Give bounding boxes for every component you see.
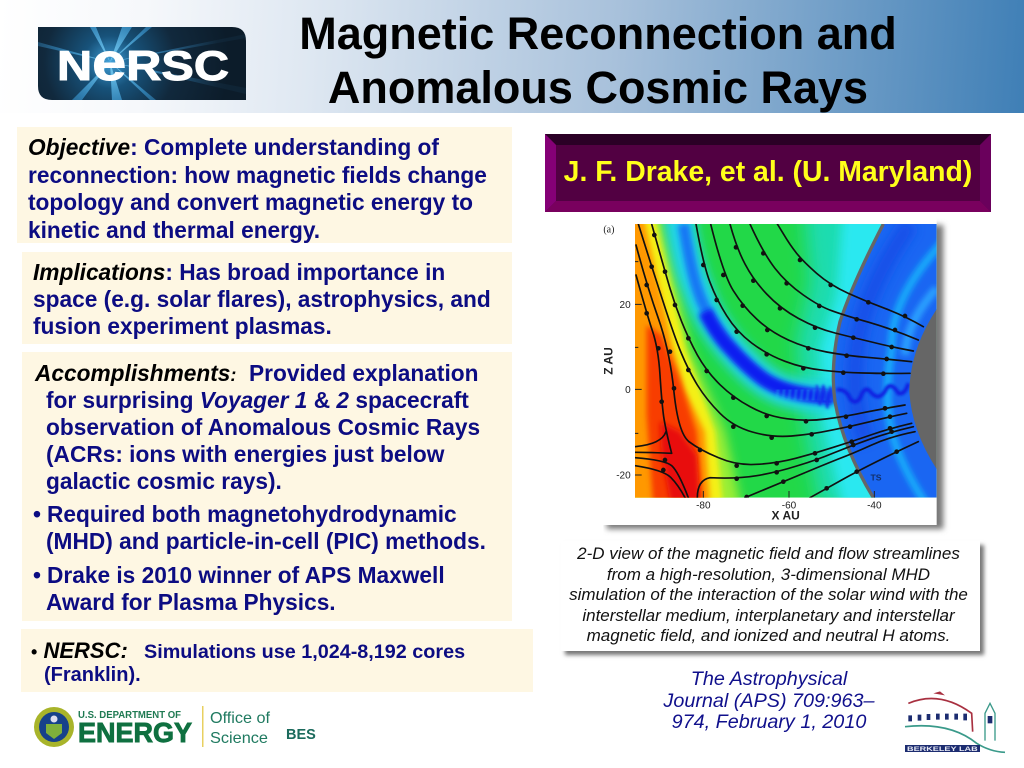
panel: accomplishments: • <box>33 562 41 588</box>
streamlines <box>635 224 923 498</box>
citation <box>663 668 875 733</box>
logo: DOE Office of Science: U.S. DEPARTMENT OF <box>78 710 181 721</box>
axes ticks and labels: -80 <box>696 500 711 511</box>
caption box: 2-D view of the magnetic field and flow streamlines <box>577 544 960 563</box>
panel: NERSC computing <box>21 629 533 692</box>
logo: NERSC <box>38 27 246 100</box>
panel: objective: kinetic and thermal energy. <box>28 217 320 243</box>
axes ticks and labels <box>601 225 882 523</box>
panel: NERSC computing: (Franklin). <box>44 664 141 686</box>
termination shock <box>833 224 883 498</box>
caption box: magnetic field, and ionized and neutral H atoms. <box>587 626 950 645</box>
panel: objective: topology and convert magnetic energy to <box>28 189 473 215</box>
panel: accomplishments: galactic cosmic rays). <box>46 468 282 494</box>
panel: accomplishments: Award for Plasma Physics. <box>46 589 336 615</box>
panel: accomplishments: (MHD) and particle-in-cell (PIC) methods. <box>46 528 486 554</box>
axes ticks and labels: Z AU <box>601 347 615 375</box>
axes ticks and labels: -40 <box>867 500 882 511</box>
caption box: interstellar medium, interplanetary and interstellar <box>582 606 955 625</box>
citation: Journal (APS) 709:963– <box>663 690 875 712</box>
heat map <box>635 224 937 498</box>
caption box <box>561 541 980 651</box>
citation: 974, February 1, 2010 <box>672 711 866 733</box>
panel: accomplishments: (ACRs: ions with energies just below <box>46 441 444 467</box>
axes ticks and labels: 0 <box>625 385 631 396</box>
figure: heliosheath simulation <box>601 221 948 533</box>
panel: objective: Objective: Complete understanding of <box>28 134 439 160</box>
wake wiggles <box>817 385 833 408</box>
author name: J. F. Drake, et al. (U. Maryland) <box>564 156 972 188</box>
header band <box>0 0 1024 113</box>
logo: NERSC: NeRSC <box>57 33 229 92</box>
panel: accomplishments: Accomplishments: Provided explanation <box>35 360 478 386</box>
streamline arrowheads <box>644 233 907 499</box>
panel: accomplishments: • <box>33 501 41 527</box>
panel: objective: reconnection: how magnetic fields change <box>28 162 487 188</box>
caption box: from a high-resolution, 3-dimensional MHD <box>607 565 930 584</box>
axes ticks and labels: TS <box>870 473 882 483</box>
panel: implications: fusion experiment plasmas. <box>33 313 332 339</box>
panel: implications: Implications: Has broad importance in <box>33 259 445 285</box>
panel: accomplishments: observation of Anomalous Cosmic Rays <box>46 414 480 440</box>
panel: objective <box>17 127 512 243</box>
axes ticks and labels: X AU <box>772 509 800 523</box>
logo: Berkeley Lab <box>904 691 1006 754</box>
panel: author banner <box>545 134 991 212</box>
panel: accomplishments: Required both magnetohydrodynamic <box>47 501 457 527</box>
figure shadow and card <box>590 215 943 540</box>
title: Anomalous Cosmic Rays <box>328 62 868 113</box>
caption box: simulation of the interaction of the solar wind with the <box>569 585 968 604</box>
citation: The Astrophysical <box>691 668 847 690</box>
axes ticks and labels: -60 <box>782 500 797 511</box>
panel: implications: space (e.g. solar flares), astrophysics, and <box>33 286 491 312</box>
title: Magnetic Reconnection and <box>299 8 897 59</box>
panel: implications <box>22 252 512 344</box>
axes ticks and labels: (a) <box>603 225 614 236</box>
logo: DOE Office of Science <box>34 706 316 748</box>
logo: DOE Office of Science: ENERGY <box>78 717 192 748</box>
logo: DOE Office of Science: Science <box>210 730 268 747</box>
panel: accomplishments: Drake is 2010 winner of APS Maxwell <box>47 562 445 588</box>
logo: Berkeley Lab: BERKELEY LAB <box>907 746 978 753</box>
panel: accomplishments: for surprising Voyager 1 & 2 spacecraft <box>46 387 469 413</box>
logo: DOE Office of Science: Office of <box>210 710 271 727</box>
inner body <box>909 307 938 472</box>
panel: accomplishments <box>22 352 512 621</box>
axes ticks and labels: -20 <box>616 471 631 482</box>
axes ticks and labels: 20 <box>620 300 631 311</box>
logo: DOE Office of Science: BES <box>286 727 316 743</box>
panel: NERSC computing: • NERSC: Simulations use 1,024-8,192 cores <box>31 638 465 663</box>
title <box>299 8 897 113</box>
